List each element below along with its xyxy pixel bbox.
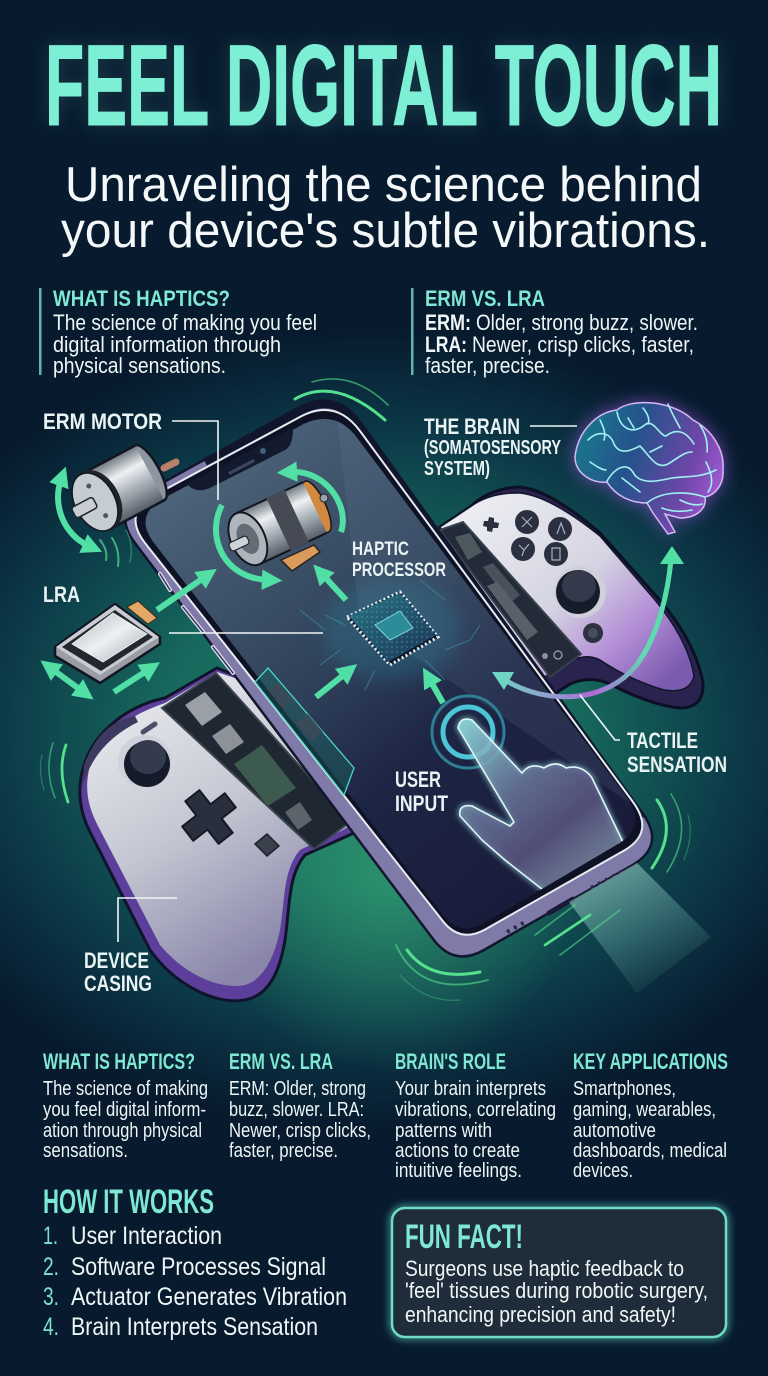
thumb stick <box>118 735 172 789</box>
label: device casing: DEVICE <box>84 948 149 973</box>
column: key applications <box>573 1049 728 1182</box>
column: what is haptics: The science of making <box>43 1078 208 1100</box>
phone screen <box>146 419 635 928</box>
column: what is haptics: WHAT IS HAPTICS? <box>43 1049 195 1074</box>
controller board behind phone glass <box>255 668 354 795</box>
steps list: 2. <box>43 1253 59 1281</box>
haptic processor chip <box>300 580 480 690</box>
vibration waves <box>40 379 690 1000</box>
column: what is haptics: ation through physical <box>43 1120 202 1142</box>
label: device casing: CASING <box>84 971 152 996</box>
column: brain's role: BRAIN'S ROLE <box>395 1049 506 1074</box>
label: the brain: SYSTEM) <box>424 458 490 480</box>
steps list: 1. <box>43 1222 58 1250</box>
straight signal arrows <box>157 575 443 703</box>
intro block: what is haptics: physical sensations. <box>53 353 226 378</box>
column: key applications: Smartphones, <box>573 1078 676 1100</box>
lra actuator <box>55 601 160 683</box>
fun fact callout: 'feel' tissues during robotic surgery, <box>405 1278 708 1303</box>
subtitle: Unraveling the science behind <box>65 158 702 212</box>
waves right of phone <box>652 794 690 872</box>
column: what is haptics: sensations. <box>43 1140 128 1162</box>
column: brain's role: Your brain interprets <box>395 1078 546 1100</box>
intro block: what is haptics: WHAT IS HAPTICS? <box>53 286 230 311</box>
column: key applications: automotive <box>573 1120 656 1142</box>
centre motor <box>217 477 337 574</box>
steps list: Software Processes Signal <box>71 1253 326 1281</box>
label: haptic processor <box>352 539 446 581</box>
waves below phone <box>396 945 488 1000</box>
label: haptic processor: PROCESSOR <box>352 560 446 581</box>
intro block: erm vs lra: ERM: <box>425 310 471 335</box>
label: haptic processor: HAPTIC <box>352 539 409 560</box>
steps list: Actuator Generates Vibration <box>71 1283 347 1311</box>
steps list: User Interaction <box>71 1222 222 1250</box>
side buttons <box>160 574 233 673</box>
column: erm vs lra: faster, precise. <box>229 1140 338 1162</box>
small buttons <box>143 724 279 856</box>
hand <box>458 719 640 900</box>
brain <box>575 403 723 534</box>
steps list: 4. <box>43 1313 59 1341</box>
hand and touch rings <box>432 696 640 900</box>
forearm <box>569 863 711 993</box>
bottom ports <box>507 869 627 932</box>
fun fact callout: Surgeons use haptic feedback to <box>405 1256 684 1281</box>
waves top of phone <box>295 379 388 420</box>
column: brain's role: patterns with <box>395 1120 492 1142</box>
d-pad <box>171 779 247 855</box>
steps list: Brain Interprets Sensation <box>71 1313 318 1341</box>
inner frame ring <box>136 410 642 935</box>
column: what is haptics: you feel digital inform- <box>43 1099 206 1121</box>
how it works heading: HOW IT WORKS <box>43 1183 214 1221</box>
touch rings <box>432 696 504 768</box>
label: user input: INPUT <box>395 791 448 816</box>
column: erm vs lra: ERM: Older, strong <box>229 1078 366 1100</box>
label: the brain: (SOMATOSENSORY <box>424 437 561 459</box>
label: device casing <box>84 948 152 996</box>
intro block: what is haptics: digital information through <box>53 332 281 357</box>
fun fact callout <box>392 1208 726 1337</box>
column: erm vs lra <box>229 1049 371 1162</box>
column: erm vs lra: buzz, slower. LRA: <box>229 1099 364 1121</box>
thumb stick and buttons <box>483 517 606 643</box>
label: the brain: THE BRAIN <box>424 414 520 439</box>
brain folds <box>588 404 716 511</box>
how it works <box>43 1183 347 1341</box>
intro block: erm vs lra: LRA: <box>425 332 467 357</box>
label: erm motor: ERM MOTOR <box>43 409 162 434</box>
label: lra: LRA <box>43 582 80 607</box>
label: user input <box>395 767 448 816</box>
leader lines <box>118 421 620 942</box>
column: key applications: dashboards, medical <box>573 1140 727 1162</box>
notch <box>187 428 293 490</box>
column: erm vs lra: Newer, crisp clicks, <box>229 1120 371 1142</box>
intro block: erm vs lra: Newer, crisp clicks, faster, <box>472 332 694 357</box>
waves left of controller <box>40 743 68 802</box>
column: what is haptics <box>43 1049 208 1162</box>
steps list: 3. <box>43 1283 59 1311</box>
fun fact callout: enhancing precision and safety! <box>405 1302 676 1327</box>
erm motor left <box>59 440 176 542</box>
column: key applications: devices. <box>573 1160 633 1182</box>
controller board panel <box>440 522 581 677</box>
column: brain's role: intuitive feelings. <box>395 1160 522 1182</box>
grip bumper <box>82 716 138 790</box>
brain feedback arrow <box>492 546 684 697</box>
lra vibration arrows <box>52 669 148 692</box>
intro block: what is haptics: The science of making you feel <box>53 310 317 335</box>
column: erm vs lra: ERM VS. LRA <box>229 1049 333 1074</box>
fun fact callout: FUN FACT! <box>405 1218 523 1256</box>
column: brain's role: actions to create <box>395 1140 520 1162</box>
right game controller <box>440 487 703 708</box>
column: brain's role <box>395 1049 556 1182</box>
subtitle <box>61 158 710 258</box>
centre motor rotation arrows <box>216 472 343 580</box>
waves at wrist <box>535 905 620 955</box>
intro block: erm vs lra: Older, strong buzz, slower. <box>476 310 698 335</box>
dark upper right frame edge <box>205 404 642 818</box>
column: key applications: gaming, wearables, <box>573 1099 716 1121</box>
intro block: erm vs lra <box>411 286 698 378</box>
face buttons <box>511 510 572 566</box>
label: the brain <box>424 414 561 480</box>
label: tactile sensation: TACTILE <box>627 728 698 753</box>
intro block: erm vs lra: faster, precise. <box>425 353 550 378</box>
label: tactile sensation: SENSATION <box>627 752 727 777</box>
label: tactile sensation <box>627 728 727 777</box>
steps list <box>43 1222 347 1341</box>
intro block: what is haptics <box>39 286 317 378</box>
waves under erm motor <box>100 530 131 566</box>
subtitle: your device's subtle vibrations. <box>61 204 710 258</box>
erm rotation arrows <box>58 480 89 546</box>
phone <box>125 400 680 956</box>
screen reflection <box>346 454 630 804</box>
phone frame <box>125 401 652 956</box>
left game controller <box>80 668 360 1001</box>
controller board panel <box>162 673 350 849</box>
label: user input: USER <box>395 767 441 792</box>
intro block: erm vs lra: ERM VS. LRA <box>425 286 545 311</box>
column: brain's role: vibrations, correlating <box>395 1099 556 1121</box>
